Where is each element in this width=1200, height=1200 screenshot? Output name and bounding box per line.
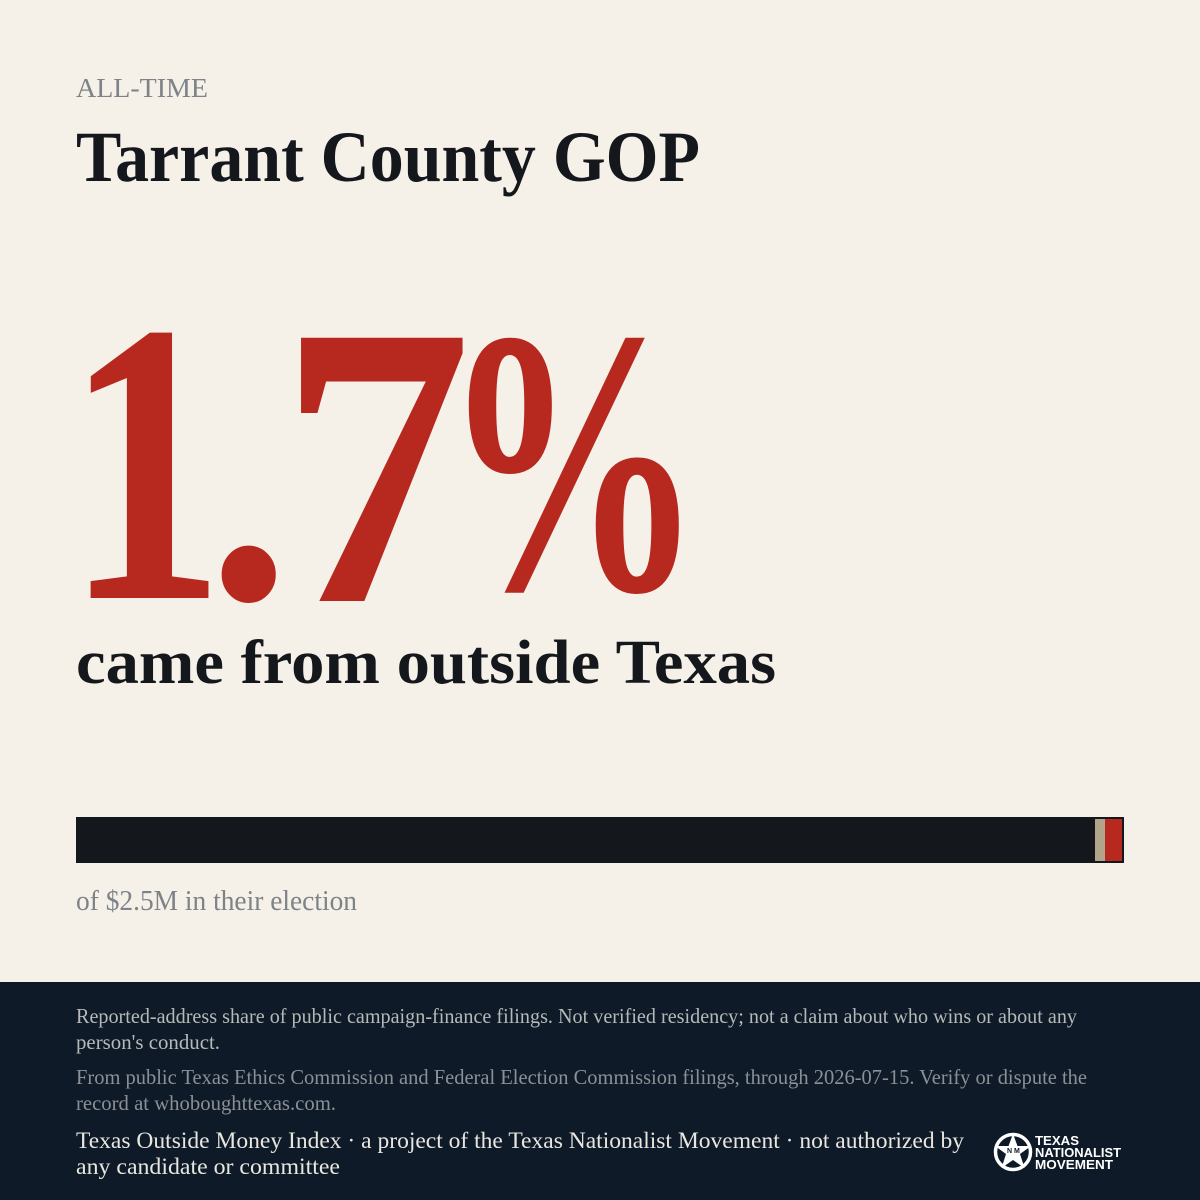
logo wordmark: NATIONALIST bbox=[1035, 1145, 1121, 1160]
source text bbox=[76, 1065, 1087, 1115]
source text: record at whoboughttexas.com. bbox=[76, 1091, 336, 1115]
project credit bbox=[76, 1128, 964, 1179]
big percentage: 7 bbox=[279, 244, 472, 689]
disclaimer text: person's conduct. bbox=[76, 1030, 220, 1054]
title: Tarrant County GOP bbox=[76, 117, 700, 197]
big percentage: % bbox=[442, 254, 703, 672]
logo: Texas Nationalist Movement bbox=[995, 1133, 1121, 1172]
stacked share bar bbox=[76, 817, 1124, 863]
logo wordmark: TEXAS bbox=[1035, 1133, 1079, 1148]
icon: star emblem bbox=[995, 1134, 1031, 1170]
icon: star emblem: N bbox=[1007, 1148, 1012, 1155]
logo wordmark: MOVEMENT bbox=[1035, 1157, 1113, 1172]
project credit: any candidate or committee bbox=[76, 1154, 340, 1179]
bar caption: of $2.5M in their election bbox=[76, 885, 357, 917]
footer panel bbox=[0, 982, 1200, 1200]
disclaimer text bbox=[76, 1004, 1077, 1054]
big percentage: 1 bbox=[65, 240, 225, 685]
eyebrow label: ALL-TIME bbox=[76, 73, 208, 103]
disclaimer text: Reported-address share of public campaign-finance filings. Not verified residency; not a claim about who wins or about any bbox=[76, 1004, 1077, 1028]
logo wordmark bbox=[1035, 1133, 1121, 1172]
subtitle: came from outside Texas bbox=[76, 629, 776, 697]
big percentage bbox=[65, 240, 703, 689]
big percentage: . bbox=[207, 284, 290, 675]
project credit: Texas Outside Money Index · a project of the Texas Nationalist Movement · not authorized by bbox=[76, 1128, 964, 1153]
icon: star emblem: M bbox=[1014, 1148, 1020, 1155]
source text: From public Texas Ethics Commission and Federal Election Commission filings, through 2026-07-15. Verify or dispute the bbox=[76, 1065, 1087, 1089]
